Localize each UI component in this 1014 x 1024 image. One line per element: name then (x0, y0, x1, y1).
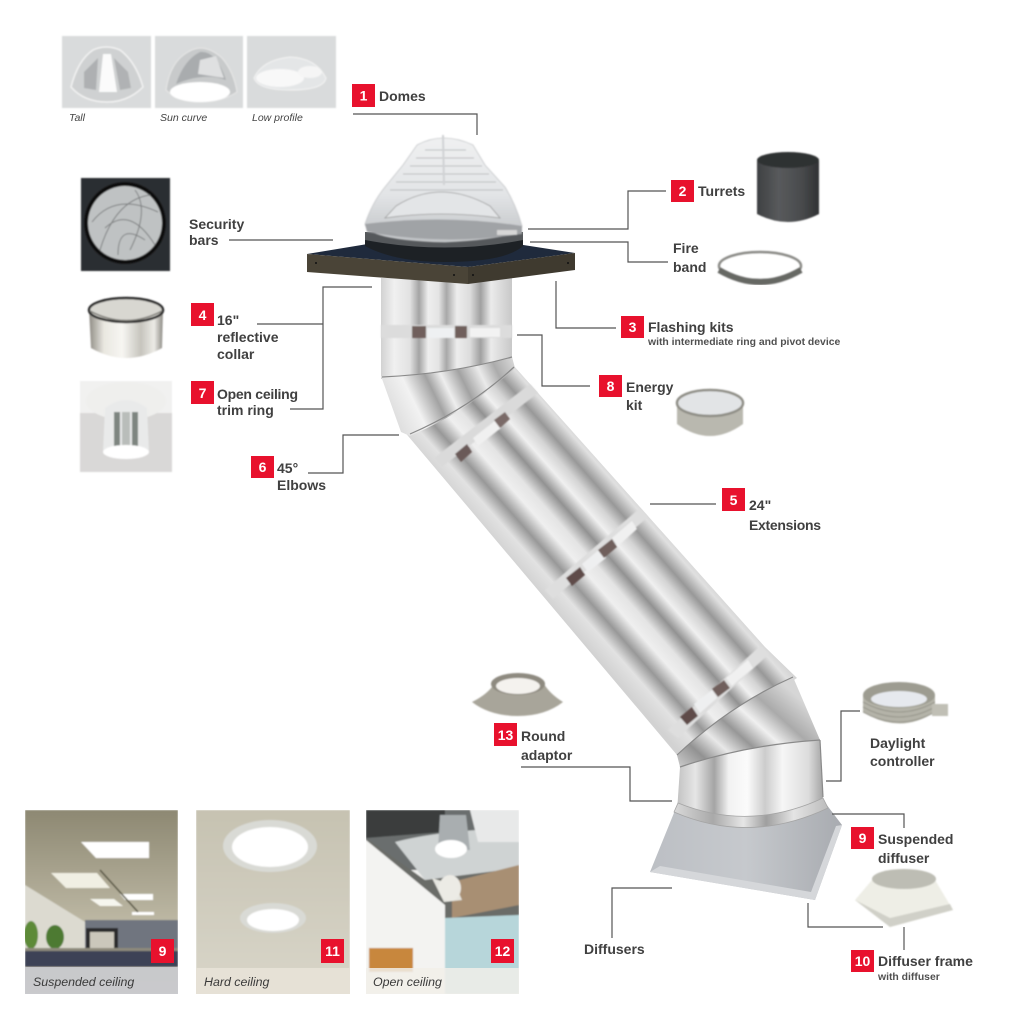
label: 7 Open ceiling trim ring: trim ring (217, 402, 274, 418)
tube: upper elbow (381, 357, 515, 436)
band: elbow tape (434, 384, 538, 467)
panel: dome options (62, 36, 336, 124)
icon: diffuser frame (855, 869, 953, 927)
label: Daylight controller (870, 735, 935, 769)
badge: 9 (151, 939, 174, 963)
label: 2 Turrets (671, 180, 745, 202)
thumbnail: low profile dome (247, 36, 336, 108)
label: 13 Round adaptor: Round (521, 728, 565, 744)
label: Diffusers: Diffusers (584, 941, 645, 957)
label: 13 Round adaptor (494, 723, 573, 763)
label: 5 24" Extensions: 5 (730, 492, 738, 508)
icon: reflective collar (89, 298, 163, 358)
band: middle tape (545, 508, 648, 599)
label: Fire band: Fire (673, 240, 699, 256)
label: 4 16" reflective collar (191, 303, 279, 362)
icon: turret (757, 152, 819, 222)
diffuser: suspended ceiling lens (650, 798, 842, 900)
label: 9 Suspended diffuser (851, 827, 953, 866)
label: Daylight controller: Daylight (870, 735, 926, 751)
label: 6 45° Elbows: 45° (277, 460, 298, 476)
label: 9 Suspended diffuser: Suspended (878, 831, 953, 847)
icon: daylight controller (863, 682, 948, 724)
label: 2 Turrets: Turrets (698, 183, 745, 199)
caption: sun curve: Sun curve (160, 112, 207, 124)
label: 6 45° Elbows (251, 456, 326, 493)
badge: 11 (321, 939, 344, 963)
label: 4 16" reflective collar: 4 (199, 307, 207, 323)
label: 6 45° Elbows: Elbows (277, 477, 326, 493)
label: Fire band: band (673, 259, 706, 275)
photo: suspended ceiling (24, 810, 178, 994)
label: Security bars: bars (189, 232, 219, 248)
label: 7 Open ceiling trim ring: Open ceiling (217, 386, 298, 402)
label: 8 Energy kit: Energy (626, 379, 674, 395)
label: 10 Diffuser frame: Diffuser frame (878, 953, 973, 969)
label: 10 Diffuser frame (851, 950, 973, 983)
label: Security bars: Security (189, 216, 244, 232)
tube: lower elbow (677, 677, 820, 767)
label: 4 16" reflective collar: reflective (217, 329, 279, 345)
label: 5 24" Extensions: 24" (749, 497, 771, 513)
label: 13 Round adaptor: adaptor (521, 747, 573, 763)
label: 3 Flashing kits: 3 (629, 319, 637, 335)
caption: tall: Tall (69, 112, 86, 124)
label: 5 24" Extensions (722, 488, 821, 533)
icon: security bars (81, 178, 170, 271)
label: Security bars (189, 216, 244, 248)
leader lines (229, 114, 904, 950)
label: 4 16" reflective collar: collar (217, 346, 255, 362)
dome (365, 135, 522, 242)
flashing plate (307, 232, 575, 284)
band: upper vertical tape (381, 325, 512, 338)
label: 7 Open ceiling trim ring: 7 (199, 385, 207, 401)
seams (382, 357, 823, 797)
label: 10 Diffuser frame: with diffuser (877, 972, 940, 983)
tube: bottom vertical section (677, 740, 823, 824)
caption: open ceiling: Open ceiling (373, 975, 442, 989)
label: 10 Diffuser frame: 10 (855, 953, 870, 969)
label: 8 Energy kit (599, 375, 674, 413)
label: 2 Turrets: 2 (679, 183, 687, 199)
badge: 12: 12 (495, 943, 510, 959)
badge: 11: 11 (325, 943, 340, 959)
label: 1 Domes: Domes (379, 88, 426, 104)
label: 3 Flashing kits (621, 316, 840, 348)
tube: vertical section (381, 278, 512, 379)
label: 6 45° Elbows: 6 (259, 459, 267, 475)
illustration: tube assembly (307, 135, 842, 900)
icon: energy ring (677, 390, 743, 436)
band: lower tape (668, 646, 769, 738)
label: 13 Round adaptor: 13 (498, 727, 513, 743)
label: 1 Domes (352, 84, 426, 107)
thumbnail: sun curve dome (155, 36, 243, 108)
tube: straight diagonal extension (403, 366, 797, 755)
label: 4 16" reflective collar: 16" (217, 312, 239, 328)
icon: fire band (719, 252, 801, 282)
label: 8 Energy kit: kit (626, 397, 643, 413)
label: 9 Suspended diffuser: 9 (859, 830, 867, 846)
label: Fire band (673, 240, 706, 275)
label: 3 Flashing kits: with intermediate ring and pivot device (647, 337, 840, 348)
label: 3 Flashing kits: Flashing kits (648, 319, 734, 335)
photo: open ceiling (366, 810, 519, 994)
photo: hard ceiling (196, 810, 350, 994)
caption: hard ceiling: Hard ceiling (204, 975, 270, 989)
label: 9 Suspended diffuser: diffuser (878, 850, 930, 866)
label: 1 Domes: 1 (360, 88, 368, 104)
label: 5 24" Extensions: Extensions (749, 517, 821, 533)
icon: open ceiling trim ring (80, 381, 172, 472)
thumbnail: tall dome (62, 36, 151, 108)
badge: 9: 9 (159, 943, 167, 959)
caption: suspended ceiling: Suspended ceiling (33, 975, 134, 989)
label: 7 Open ceiling trim ring (191, 381, 298, 418)
label: Daylight controller: controller (870, 753, 935, 769)
icon: round adaptor (472, 673, 563, 716)
badge: 12 (491, 939, 514, 963)
turret ring (365, 232, 523, 262)
label: 8 Energy kit: 8 (607, 378, 615, 394)
caption: low profile: Low profile (252, 112, 303, 124)
